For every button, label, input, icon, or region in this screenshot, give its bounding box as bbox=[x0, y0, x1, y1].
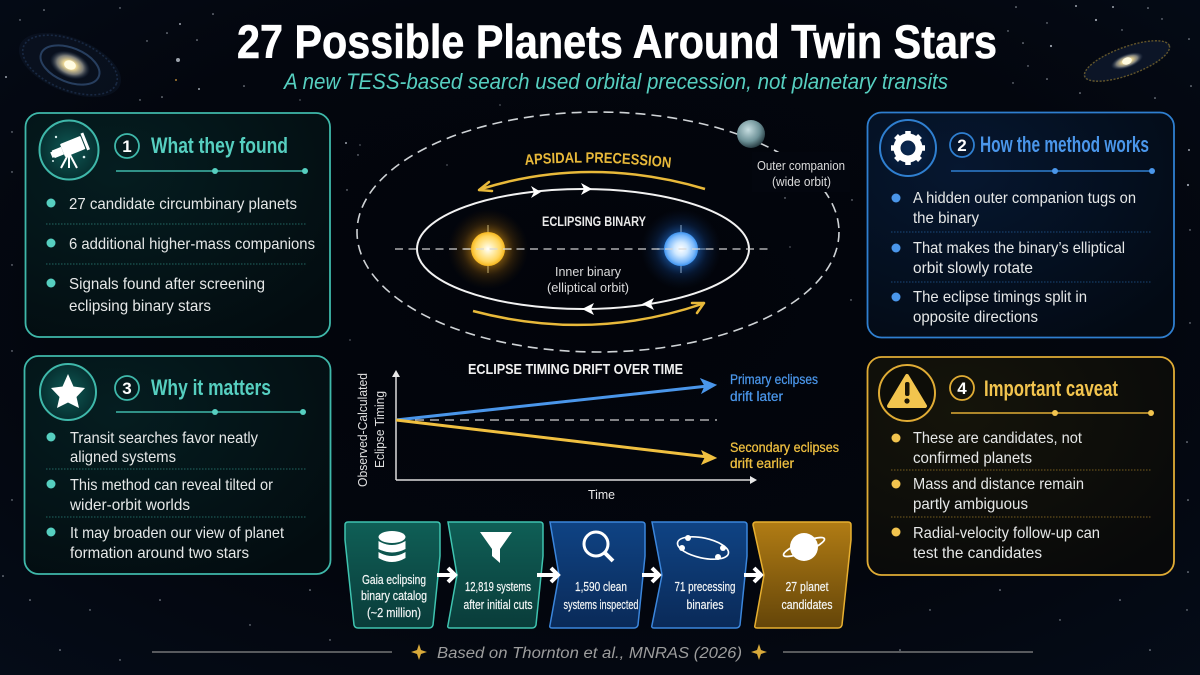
outer companion label bbox=[757, 158, 845, 189]
bullet: 6 additional higher-mass companions bbox=[69, 236, 315, 253]
step 2: initial cuts bbox=[448, 522, 543, 628]
axes bbox=[392, 370, 757, 484]
number badge 4: 4 bbox=[957, 379, 967, 398]
step 5: candidates: candidates bbox=[782, 597, 833, 612]
icon: gear bbox=[880, 120, 936, 176]
y axis label bbox=[355, 373, 387, 487]
bullet: This method can reveal tilted or bbox=[70, 477, 274, 494]
bullet: confirmed planets bbox=[913, 450, 1032, 467]
heading: What they found bbox=[151, 133, 288, 158]
step 2: initial cuts: after initial cuts bbox=[464, 597, 533, 612]
bullet: test the candidates bbox=[913, 545, 1042, 562]
bullet bbox=[913, 289, 1087, 326]
outer companion label: (wide orbit) bbox=[772, 174, 831, 189]
number badge 1 bbox=[115, 134, 139, 158]
flow: screening funnel bbox=[345, 522, 851, 628]
bullet bbox=[913, 240, 1125, 277]
bullet: 27 candidate circumbinary planets bbox=[69, 196, 297, 213]
bullet: The eclipse timings split in bbox=[913, 289, 1087, 306]
secondary label: Secondary eclipses bbox=[730, 440, 839, 455]
primary label: Primary eclipses bbox=[730, 372, 818, 387]
icon: star bbox=[40, 364, 96, 420]
x axis label: Time bbox=[588, 487, 615, 502]
step 1: catalog: (~2 million) bbox=[367, 605, 421, 620]
blue star bbox=[641, 209, 721, 289]
icon: database bbox=[378, 531, 406, 562]
bullet bbox=[913, 430, 1082, 467]
step 3: inspected bbox=[550, 522, 645, 628]
panel: how the method works bbox=[868, 112, 1174, 338]
bullet bbox=[913, 190, 1136, 227]
icon: ringed planet bbox=[782, 533, 826, 561]
bullet bbox=[69, 477, 274, 514]
bullet: eclipsing binary stars bbox=[69, 298, 211, 315]
title: 27 Possible Planets Around Twin Stars bbox=[237, 15, 997, 68]
icon: telescope bbox=[40, 120, 98, 180]
heading: Important caveat bbox=[984, 376, 1119, 401]
subtitle: A new TESS-based search used orbital precession, not planetary transits bbox=[282, 69, 948, 94]
secondary label bbox=[730, 440, 839, 471]
bullet bbox=[913, 525, 1100, 562]
step 3: inspected: systems inspected bbox=[564, 597, 638, 612]
inner binary label bbox=[547, 264, 629, 295]
bullet bbox=[70, 525, 285, 562]
panel: important caveat bbox=[868, 357, 1174, 575]
step 3: inspected: 1,590 clean bbox=[575, 579, 627, 594]
step 1: catalog: Gaia eclipsing bbox=[362, 572, 426, 587]
number badge 1: 1 bbox=[122, 137, 132, 156]
flow arrows bbox=[437, 568, 761, 582]
yellow star bbox=[448, 209, 528, 289]
secondary label: drift earlier bbox=[730, 456, 794, 471]
footer credit: Based on Thornton et al., MNRAS (2026) bbox=[437, 645, 742, 662]
bullet: It may broaden our view of planet bbox=[70, 525, 285, 542]
blue drift line bbox=[396, 379, 716, 420]
icon: orbit bbox=[675, 533, 731, 563]
icon: magnifier bbox=[584, 532, 613, 561]
step 5: candidates: 27 planet bbox=[786, 579, 829, 594]
bullet: A hidden outer companion tugs on bbox=[913, 190, 1136, 207]
icon: funnel bbox=[480, 532, 512, 563]
bullet: aligned systems bbox=[70, 449, 176, 466]
heading: Why it matters bbox=[151, 375, 271, 400]
chart title: ECLIPSE TIMING DRIFT OVER TIME bbox=[468, 361, 683, 378]
outer companion planet bbox=[737, 120, 765, 148]
number badge 4 bbox=[950, 376, 974, 400]
top precession arrow bbox=[479, 172, 705, 191]
y axis label: Eclipse Timing bbox=[372, 391, 387, 468]
number badge 2 bbox=[950, 133, 974, 157]
number badge 3: 3 bbox=[122, 379, 132, 398]
bullet: the binary bbox=[913, 210, 979, 227]
bullet: Transit searches favor neatly bbox=[70, 430, 258, 447]
footer credit bbox=[152, 644, 1033, 662]
inner binary orbit bbox=[417, 189, 749, 309]
number badge 3 bbox=[115, 376, 139, 400]
bullet bbox=[913, 476, 1084, 513]
bullet: Signals found after screening bbox=[69, 276, 265, 293]
bottom precession arrow bbox=[473, 303, 704, 325]
number badge 2: 2 bbox=[957, 136, 967, 155]
y axis label: Observed-Calculated bbox=[355, 373, 370, 487]
inner binary label: (elliptical orbit) bbox=[547, 280, 629, 295]
orbit arrowheads bbox=[531, 183, 654, 315]
bullet: wider-orbit worlds bbox=[69, 497, 190, 514]
bullet bbox=[70, 430, 258, 466]
bullet: formation around two stars bbox=[70, 545, 249, 562]
step 4: precessing bbox=[652, 522, 747, 628]
bullet: partly ambiguous bbox=[913, 496, 1028, 513]
bullet bbox=[69, 276, 265, 315]
icon: warning bbox=[879, 365, 935, 421]
bullet: That makes the binary’s elliptical bbox=[913, 240, 1125, 257]
chart: eclipse timing drift bbox=[355, 361, 839, 502]
galaxy: right spiral bbox=[1079, 32, 1175, 90]
step 1: catalog: binary catalog bbox=[361, 588, 427, 603]
bullet: These are candidates, not bbox=[913, 430, 1082, 447]
outer companion orbit bbox=[357, 112, 839, 352]
bullet: Radial-velocity follow-up can bbox=[913, 525, 1100, 542]
primary label bbox=[730, 372, 818, 404]
bullet: orbit slowly rotate bbox=[913, 260, 1033, 277]
step 4: precessing: 71 precessing bbox=[674, 579, 736, 594]
step 5: candidates bbox=[753, 522, 851, 628]
eclipsing binary label: ECLIPSING BINARY bbox=[542, 214, 646, 229]
step 4: precessing: binaries bbox=[686, 597, 724, 612]
primary label: drift later bbox=[730, 389, 783, 404]
panel: what they found bbox=[26, 113, 330, 337]
apsidal precession label: APSIDAL PRECESSION bbox=[525, 152, 671, 168]
step 2: initial cuts: 12,819 systems bbox=[465, 579, 531, 594]
yellow drift line bbox=[396, 420, 716, 464]
bullet: opposite directions bbox=[913, 309, 1038, 326]
inner binary label: Inner binary bbox=[555, 264, 621, 279]
outer companion label: Outer companion bbox=[757, 158, 845, 173]
orbit diagram bbox=[356, 111, 845, 353]
galaxy: left spiral bbox=[10, 20, 130, 110]
step 1: catalog bbox=[345, 522, 440, 628]
panel: why it matters bbox=[24, 356, 330, 574]
bullet: Mass and distance remain bbox=[913, 476, 1084, 493]
